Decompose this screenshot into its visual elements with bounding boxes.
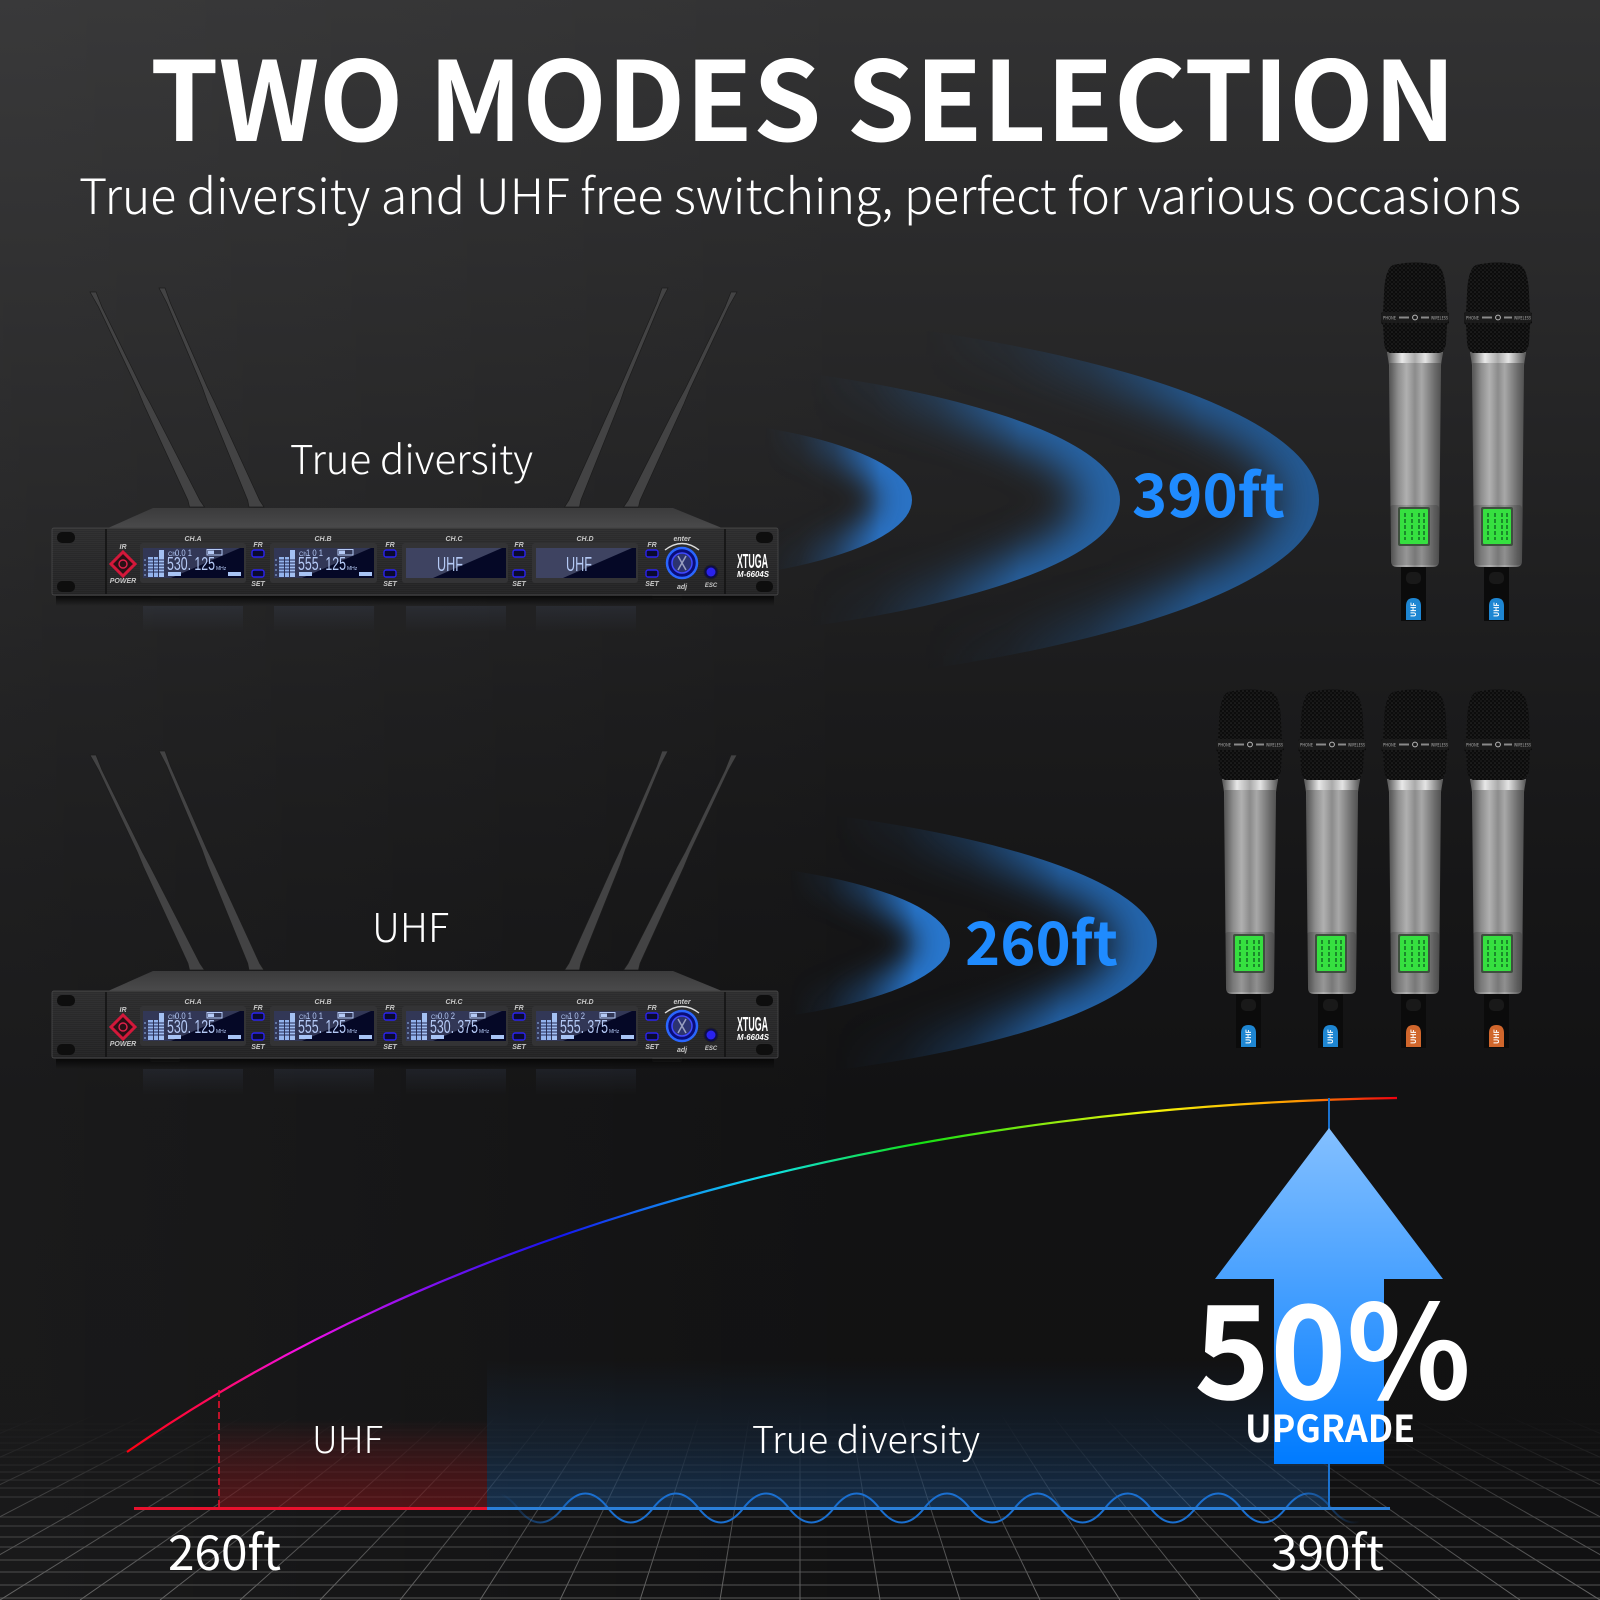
label: true diversity: True diversity xyxy=(290,428,533,486)
receiver: UHF mode: MHz xyxy=(479,1029,490,1035)
range chart xyxy=(127,1098,1397,1584)
receiver: true diversity mode: FR xyxy=(385,542,395,549)
upgrade arrow xyxy=(1215,1128,1443,1464)
microphone B: UHF xyxy=(1326,1029,1336,1044)
receiver: UHF mode xyxy=(52,751,778,1095)
receiver: UHF mode: SET xyxy=(383,1044,398,1051)
receiver: true diversity mode xyxy=(52,288,778,632)
baseline blue xyxy=(487,1507,1390,1510)
receiver: true diversity mode: CH.B xyxy=(314,536,332,543)
260ft axis value: 260ft xyxy=(168,1514,281,1584)
receiver: UHF mode: Ch xyxy=(168,1015,176,1021)
receiver: UHF mode: FR xyxy=(647,1005,657,1012)
receiver: true diversity mode: FR xyxy=(514,542,524,549)
receiver: true diversity mode: UHF xyxy=(437,554,463,576)
receiver: UHF mode: CH.D xyxy=(576,999,594,1006)
receiver: UHF mode: CH.A xyxy=(184,999,202,1006)
microphone D: UHF xyxy=(1492,1029,1502,1044)
receiver: UHF mode: 530. 125 xyxy=(167,1017,215,1037)
microphone C xyxy=(1381,690,1449,1048)
receiver: UHF mode: Ch xyxy=(299,1015,307,1021)
microphone 1: UHF xyxy=(1409,602,1419,617)
label: UHF: UHF xyxy=(372,896,449,954)
receiver: true diversity mode: 1 0 1 xyxy=(306,548,323,558)
receiver: UHF mode: 0.0 1 xyxy=(175,1011,192,1021)
title: TWO MODES SELECTION xyxy=(150,13,1456,173)
receiver: UHF mode: 0.0 2 xyxy=(438,1011,455,1021)
receiver: UHF mode: SET xyxy=(645,1044,660,1051)
true diversity axis label: True diversity xyxy=(752,1410,980,1464)
receiver: true diversity mode: enter xyxy=(673,536,692,543)
receiver: UHF mode: 1 0 1 xyxy=(306,1011,323,1021)
microphone 1 xyxy=(1381,262,1449,621)
receiver: true diversity mode: 530. 125 xyxy=(167,554,215,574)
receiver: UHF mode: MHz xyxy=(347,1029,358,1035)
receiver: true diversity mode: SET xyxy=(251,581,266,588)
signal arcs: UHF range xyxy=(808,822,1157,1063)
receiver: UHF mode: MHz xyxy=(216,1029,227,1035)
receiver: true diversity mode: FR xyxy=(647,542,657,549)
range label: 260ft: 260ft xyxy=(965,896,1118,983)
receiver: true diversity mode: Ch xyxy=(168,552,176,558)
receiver: true diversity mode: FR xyxy=(253,542,263,549)
receiver: UHF mode: POWER xyxy=(110,1041,136,1048)
microphone 2: UHF xyxy=(1492,602,1502,617)
receiver: true diversity mode: 0.0 1 xyxy=(175,548,192,558)
perspective floor grid xyxy=(0,1436,1600,1600)
microphones: true diversity pair xyxy=(1381,262,1532,621)
receiver: UHF mode: FR xyxy=(253,1005,263,1012)
microphone B xyxy=(1298,690,1366,1048)
receiver: UHF mode: IR xyxy=(120,1007,126,1014)
390ft axis value: 390ft xyxy=(1271,1514,1384,1584)
receiver: UHF mode: 555. 125 xyxy=(298,1017,346,1037)
receiver: UHF mode: Ch xyxy=(561,1015,569,1021)
receiver: UHF mode: XTUGA xyxy=(737,1014,768,1036)
receiver: UHF mode: M-6604S xyxy=(737,1033,770,1042)
true diversity marker line xyxy=(1328,1098,1330,1508)
receiver: true diversity mode: SET xyxy=(512,581,527,588)
UHF axis label: UHF xyxy=(312,1410,383,1464)
microphone 2 xyxy=(1464,262,1532,621)
receiver: true diversity mode: UHF xyxy=(566,554,592,576)
receiver: true diversity mode: IR xyxy=(120,544,126,551)
receiver: UHF mode: MHz xyxy=(609,1029,620,1035)
receiver: true diversity mode: CH.A xyxy=(184,536,202,543)
receiver: true diversity mode: Ch xyxy=(299,552,307,558)
receiver: UHF mode: SET xyxy=(251,1044,266,1051)
true diversity range area xyxy=(487,1360,1329,1508)
receiver: true diversity mode: M-6604S xyxy=(737,570,770,579)
receiver: true diversity mode: SET xyxy=(383,581,398,588)
receiver: UHF mode: ESC xyxy=(705,1046,718,1052)
receiver: true diversity mode: CH.C xyxy=(445,536,463,543)
receiver: true diversity mode: POWER xyxy=(110,578,136,585)
microphone A: UHF xyxy=(1244,1029,1254,1044)
UHF range area xyxy=(219,1420,487,1508)
range label: 390ft: 390ft xyxy=(1132,448,1285,535)
signal arcs: true diversity range xyxy=(784,344,1319,657)
microphone C: UHF xyxy=(1409,1029,1419,1044)
receiver: true diversity mode: CH.D xyxy=(576,536,594,543)
receiver: UHF mode: SET xyxy=(512,1044,527,1051)
baseline red xyxy=(134,1507,487,1510)
50% callout: 50% xyxy=(1194,1249,1471,1437)
rainbow range curve xyxy=(127,1098,1397,1452)
microphones: UHF quartet xyxy=(1216,690,1532,1048)
receiver: UHF mode: 1 0 2 xyxy=(568,1011,585,1021)
receiver: true diversity mode: 555. 125 xyxy=(298,554,346,574)
receiver: true diversity mode: XTUGA xyxy=(737,551,768,573)
receiver: UHF mode: FR xyxy=(514,1005,524,1012)
receiver: UHF mode: CH.B xyxy=(314,999,332,1006)
microphone A xyxy=(1216,690,1284,1048)
receiver: true diversity mode: ESC xyxy=(705,583,718,589)
receiver: true diversity mode: MHz xyxy=(216,566,227,572)
receiver: UHF mode: adj xyxy=(677,1047,688,1054)
microphone D xyxy=(1464,690,1532,1048)
upgrade label: UPGRADE xyxy=(1245,1399,1415,1453)
receiver: true diversity mode: MHz xyxy=(347,566,358,572)
receiver: UHF mode: Ch xyxy=(431,1015,439,1021)
receiver: true diversity mode: SET xyxy=(645,581,660,588)
receiver: UHF mode: FR xyxy=(385,1005,395,1012)
sine wave xyxy=(472,1494,1376,1522)
subtitle: True diversity and UHF free switching, perfect for various occasions xyxy=(79,158,1521,229)
receiver: true diversity mode: adj xyxy=(677,584,688,591)
receiver: UHF mode: 555. 375 xyxy=(560,1017,608,1037)
receiver: UHF mode: enter xyxy=(673,999,692,1006)
receiver: UHF mode: 530. 375 xyxy=(430,1017,478,1037)
receiver: UHF mode: CH.C xyxy=(445,999,463,1006)
UHF dashed marker xyxy=(218,1390,220,1508)
